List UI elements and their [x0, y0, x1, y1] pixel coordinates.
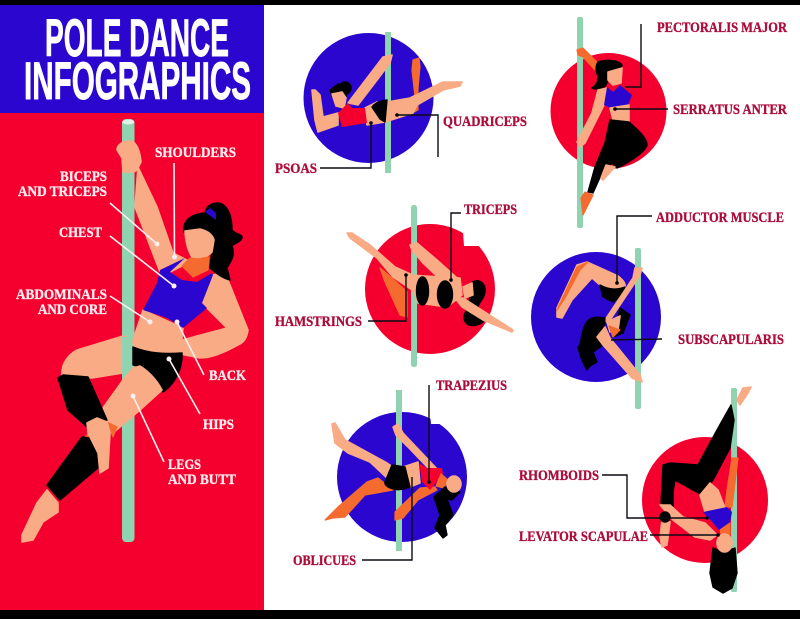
label: abdominals and core: AND CORE [38, 302, 107, 318]
pose 3: red circle, triceps and hamstrings [275, 202, 517, 367]
title [24, 9, 251, 111]
label: oblicues: OBLICUES [293, 553, 356, 569]
leader lines [320, 113, 438, 168]
label: biceps and triceps: BICEPS [60, 169, 107, 185]
dancer [325, 423, 461, 538]
title: INFOGRAPHICS [24, 52, 251, 111]
label: abdominals and core: ABDOMINALS [16, 287, 107, 303]
label: subscapularis: SUBSCAPULARIS [678, 332, 784, 348]
pose 1: blue circle, psoas and quadriceps [275, 32, 527, 177]
main dancer figure [22, 141, 248, 542]
label: biceps and triceps: AND TRICEPS [18, 184, 107, 200]
label: hamstrings: HAMSTRINGS [275, 314, 362, 330]
label: abdominals and core [16, 287, 107, 318]
label: triceps: TRICEPS [464, 202, 517, 218]
title: POLE DANCE [45, 9, 229, 68]
label: biceps and triceps [18, 169, 107, 200]
dancer [557, 262, 642, 382]
pose 2: red circle, pectoralis and serratus [550, 17, 787, 228]
panel: main figure muscles [0, 113, 264, 610]
leader lines [368, 213, 461, 321]
label: shoulders: SHOULDERS [155, 145, 236, 161]
dancer [577, 48, 647, 215]
label: back: BACK [209, 368, 246, 384]
label: quadriceps: QUADRICEPS [443, 114, 527, 130]
label: rhomboids: RHOMBOIDS [519, 468, 599, 484]
label: psoas: PSOAS [275, 161, 317, 177]
label: levator scapulae: LEVATOR SCAPULAE [519, 529, 648, 545]
label: chest: CHEST [59, 225, 102, 241]
label: trapezius: TRAPEZIUS [436, 378, 507, 394]
label: legs and butt: LEGS [168, 457, 201, 473]
leader lines [611, 216, 662, 340]
leader lines [613, 24, 668, 111]
dancer [347, 205, 513, 367]
pose 5: blue circle, trapezius and oblicues [293, 378, 507, 569]
label: legs and butt: AND BUTT [168, 472, 236, 488]
leader lines and dots [110, 163, 204, 462]
leader lines [362, 385, 431, 560]
pose 6: red circle, rhomboids and levator scapulae [519, 387, 768, 593]
label: hips: HIPS [203, 417, 234, 433]
panel: title header [0, 5, 264, 113]
label: legs and butt [168, 457, 236, 488]
pole [122, 119, 134, 542]
pose 4: blue circle, adductor and subscapularis [531, 210, 784, 409]
leader lines [602, 475, 720, 537]
dancer [312, 55, 462, 132]
dancer [660, 387, 751, 593]
